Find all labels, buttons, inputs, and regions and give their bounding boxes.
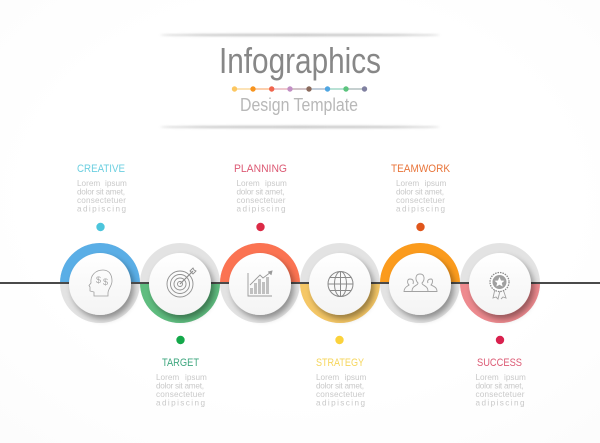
text block: teamwork (396, 179, 447, 214)
text block: teamwork: ipsum (424, 179, 447, 188)
text block: teamwork: adipiscing (396, 204, 445, 214)
dot: teamwork (416, 223, 425, 231)
text block: target: adipiscing (156, 398, 205, 408)
text block: target: consectetuer (156, 390, 205, 399)
text block: creative (77, 179, 127, 214)
title: Infographics (219, 40, 381, 81)
text block: creative: dolor sit amet, (77, 188, 125, 196)
label: strategy (316, 336, 367, 408)
text block: creative: consectetuer (77, 196, 126, 205)
label: creative: CREATIVE (77, 163, 125, 175)
label: success (476, 336, 526, 408)
text block: planning: Lorem (236, 179, 260, 188)
text block: planning (236, 179, 287, 214)
text block: strategy: consectetuer (316, 390, 365, 399)
dot: planning (256, 223, 265, 231)
text block: planning: consectetuer (236, 196, 286, 205)
dot: strategy (335, 336, 344, 344)
label: planning (234, 163, 287, 231)
text block: success (476, 373, 526, 408)
text block: teamwork: Lorem (396, 179, 419, 188)
text block: success: Lorem (476, 373, 499, 382)
label: planning: PLANNING (234, 163, 287, 175)
text block: success: consectetuer (476, 390, 525, 399)
step 2: target ring (131, 243, 221, 323)
text block: success: dolor sit amet, (476, 382, 524, 390)
label: target (156, 336, 207, 408)
label: target: TARGET (162, 357, 199, 369)
header: title block (160, 34, 440, 128)
icon: rising bar chart (248, 271, 272, 296)
icon: target with arrow (167, 268, 196, 297)
text block: strategy: Lorem (316, 373, 339, 382)
step 1: creative ring (59, 243, 140, 323)
text block: target: dolor sit amet, (156, 382, 204, 390)
subtitle: Design Template (240, 95, 358, 115)
text block: planning: ipsum (265, 179, 287, 188)
text block: target: Lorem (156, 373, 179, 382)
dot: target (176, 336, 185, 344)
dot: success (496, 336, 504, 344)
text block: creative: ipsum (105, 179, 127, 188)
dot: creative (96, 223, 105, 231)
text block: target (156, 373, 207, 408)
text block: strategy (316, 373, 367, 408)
label: success: SUCCESS (477, 357, 522, 369)
text block: teamwork: consectetuer (396, 196, 445, 205)
text block: creative: adipiscing (77, 204, 126, 214)
text block: strategy: adipiscing (316, 398, 365, 408)
step 5: teamwork ring (379, 243, 461, 323)
text block: success: ipsum (504, 373, 526, 382)
label: strategy: STRATEGY (316, 357, 365, 369)
coloured dot line (232, 86, 367, 92)
text block: target: ipsum (185, 373, 207, 382)
text block: planning: dolor sit amet, (236, 188, 284, 196)
step 3: planning ring (219, 243, 301, 323)
label: creative (77, 163, 127, 231)
icon: award badge (490, 272, 509, 299)
icon: head with dollar signs: $ (103, 277, 108, 287)
text block: planning: adipiscing (236, 204, 286, 214)
text block: strategy: dolor sit amet, (316, 382, 364, 390)
text block: success: adipiscing (476, 398, 525, 408)
label: teamwork (391, 163, 451, 231)
text block: teamwork: dolor sit amet, (396, 188, 444, 196)
timeline line (0, 282, 600, 284)
icon: globe (328, 272, 353, 296)
label: teamwork: TEAMWORK (391, 163, 451, 175)
text block: strategy: ipsum (344, 373, 367, 382)
icon: head with dollar signs: $ (96, 275, 101, 285)
icon: head with dollar signs (89, 270, 112, 296)
icon: group of people (404, 274, 437, 292)
text block: creative: Lorem (77, 179, 100, 188)
step 6: success ring (459, 243, 541, 323)
step 4: strategy ring (299, 243, 381, 323)
